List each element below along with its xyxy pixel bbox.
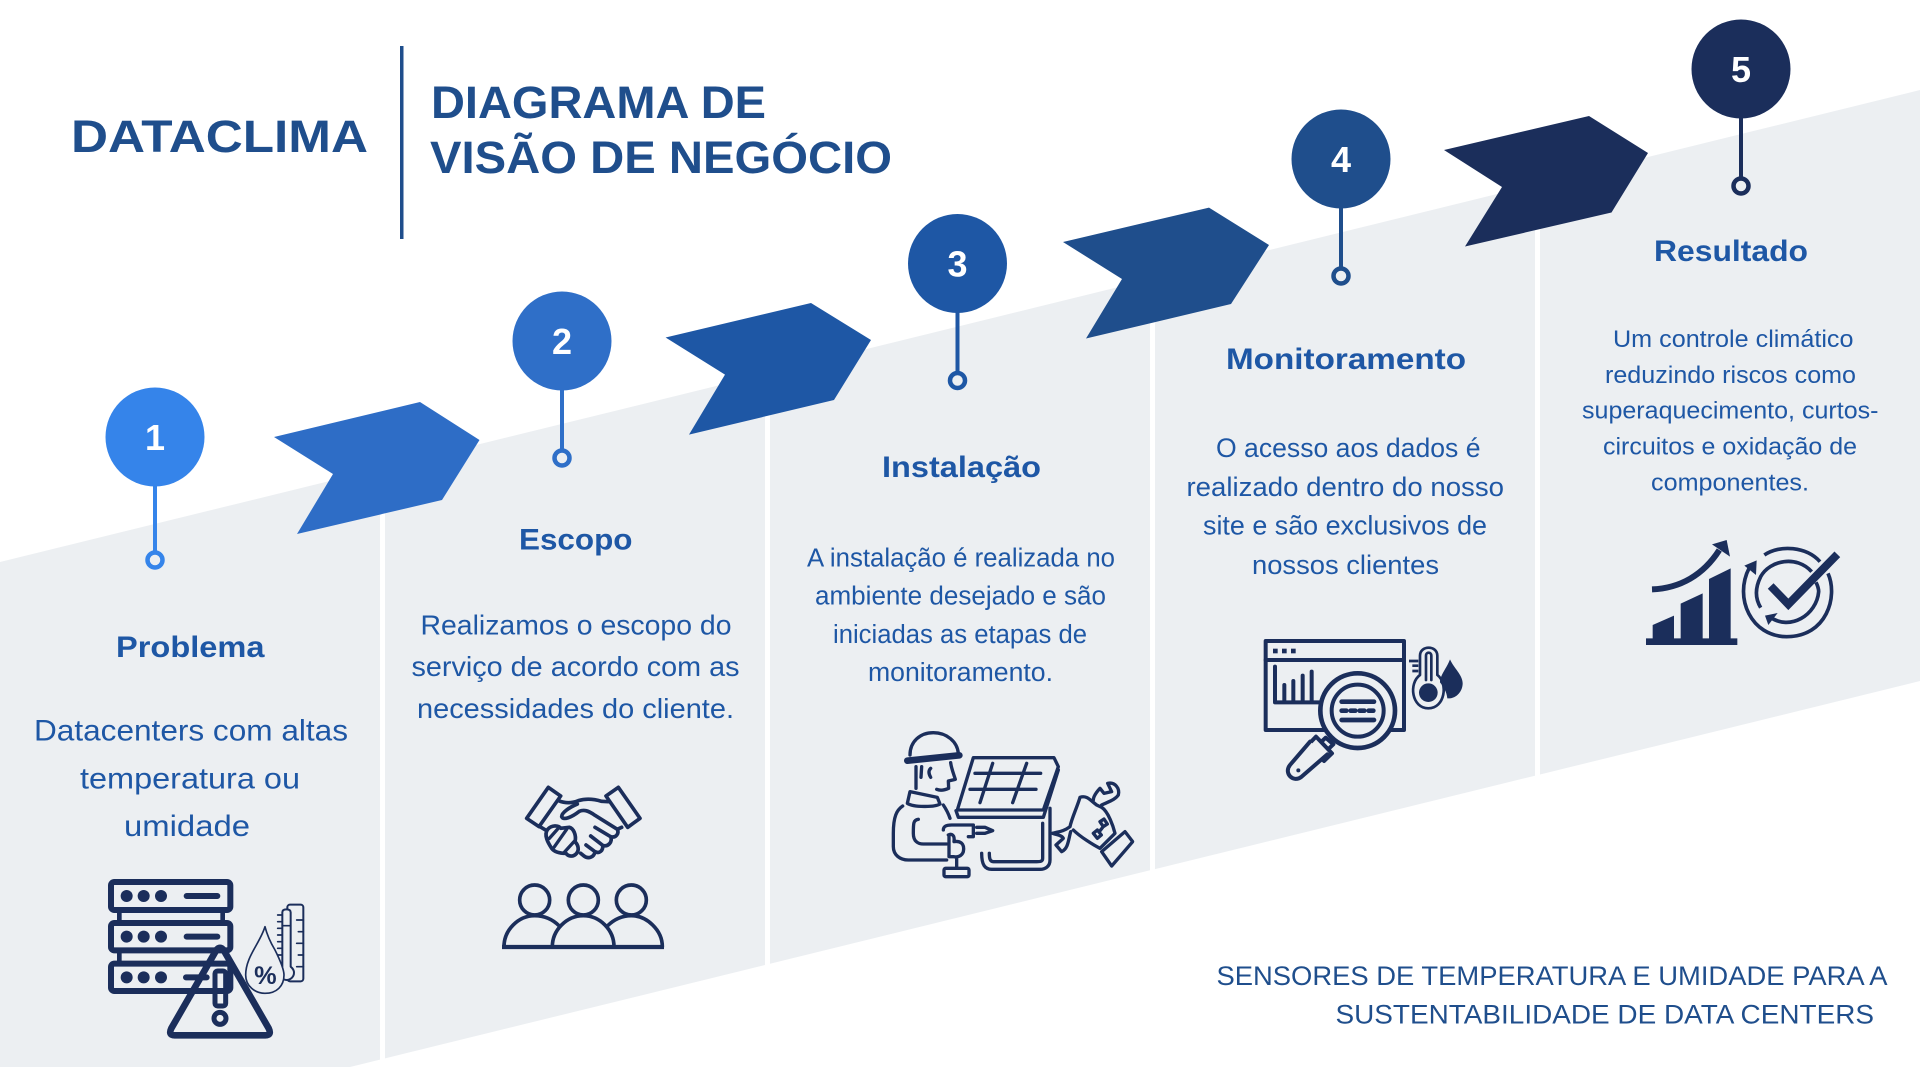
title: diagram heading bbox=[430, 77, 892, 183]
icon: handshake and team bbox=[502, 787, 664, 947]
text: monitoramento description bbox=[1186, 433, 1504, 580]
marker: step 2: 2 bbox=[552, 321, 572, 362]
footer tagline bbox=[1216, 961, 1888, 1030]
footer tagline: SUSTENTABILIDADE DE DATA CENTERS bbox=[1336, 1000, 1874, 1030]
text: instalação description: iniciadas as etapas de bbox=[833, 621, 1087, 649]
arrow: step 4 to 5 bbox=[1444, 116, 1648, 246]
text: resultado description: Um controle climático bbox=[1613, 326, 1854, 353]
icon: server with warning, humidity and thermometer bbox=[111, 882, 303, 1035]
marker: step 4: 4 bbox=[1331, 139, 1351, 180]
arrow: step 3 to 4 bbox=[1063, 208, 1269, 338]
marker: step 5: 5 bbox=[1731, 49, 1751, 90]
title: diagram heading: DIAGRAMA DE bbox=[431, 77, 766, 128]
panel: escopo bbox=[385, 374, 765, 1058]
text: problema description bbox=[34, 714, 348, 843]
marker: step 1 bbox=[106, 388, 204, 568]
marker: step 3 bbox=[908, 214, 1007, 388]
title: company name: DATACLIMA bbox=[71, 111, 368, 162]
text: monitoramento description: site e são exclusivos de bbox=[1203, 510, 1487, 540]
text: resultado description: componentes. bbox=[1651, 470, 1809, 497]
arrow: step 1 to 2 bbox=[274, 402, 480, 534]
text: escopo description: Realizamos o escopo do bbox=[420, 610, 732, 640]
text: instalação description: monitoramento. bbox=[868, 659, 1053, 687]
text: problema description: temperatura ou bbox=[80, 762, 300, 796]
text: resultado description: superaquecimento, curtos- bbox=[1582, 398, 1878, 424]
title divider bbox=[400, 46, 404, 239]
text: resultado description: reduzindo riscos como bbox=[1605, 362, 1856, 389]
title: diagram heading: VISÃO DE NEGÓCIO bbox=[430, 131, 892, 183]
panel: instalação bbox=[770, 279, 1150, 964]
arrow: step 2 to 3 bbox=[666, 303, 871, 435]
text: escopo description: serviço de acordo com as bbox=[412, 651, 740, 682]
marker: step 2 bbox=[512, 292, 612, 466]
panel: problema bbox=[0, 469, 380, 1067]
heading: monitoramento: Monitoramento bbox=[1226, 343, 1466, 376]
icon: server with warning, humidity and thermometer: % bbox=[254, 962, 277, 990]
text: instalação description bbox=[807, 544, 1115, 687]
text: resultado description: circuitos e oxidação de bbox=[1603, 434, 1857, 460]
marker: step 4 bbox=[1292, 110, 1390, 284]
icon: dashboard magnifier thermometer and drop bbox=[1266, 641, 1463, 779]
marker: step 1: 1 bbox=[145, 417, 165, 458]
text: escopo description bbox=[412, 610, 740, 724]
footer tagline: SENSORES DE TEMPERATURA E UMIDADE PARA A bbox=[1216, 961, 1888, 991]
icon: growth chart and check cycle bbox=[1646, 540, 1837, 645]
text: instalação description: ambiente desejado e são bbox=[815, 582, 1106, 610]
panel: resultado bbox=[1540, 90, 1920, 774]
text: monitoramento description: O acesso aos dados é bbox=[1216, 433, 1480, 463]
text: escopo description: necessidades do cliente. bbox=[417, 693, 734, 724]
icon: installer with panel and tools bbox=[893, 733, 1133, 877]
heading: escopo: Escopo bbox=[519, 524, 632, 556]
text: problema description: Datacenters com altas bbox=[34, 714, 348, 748]
panel: monitoramento bbox=[1155, 185, 1535, 869]
heading: instalação: Instalação bbox=[882, 451, 1041, 484]
heading: resultado: Resultado bbox=[1654, 235, 1808, 268]
marker: step 3: 3 bbox=[947, 244, 968, 284]
marker: step 5 bbox=[1692, 20, 1790, 194]
text: monitoramento description: realizado dentro do nosso bbox=[1186, 472, 1504, 502]
text: problema description: umidade bbox=[124, 810, 250, 843]
text: resultado description bbox=[1582, 326, 1878, 497]
text: instalação description: A instalação é realizada no bbox=[807, 544, 1115, 572]
text: monitoramento description: nossos clientes bbox=[1252, 550, 1439, 580]
heading: problema: Problema bbox=[116, 631, 265, 664]
